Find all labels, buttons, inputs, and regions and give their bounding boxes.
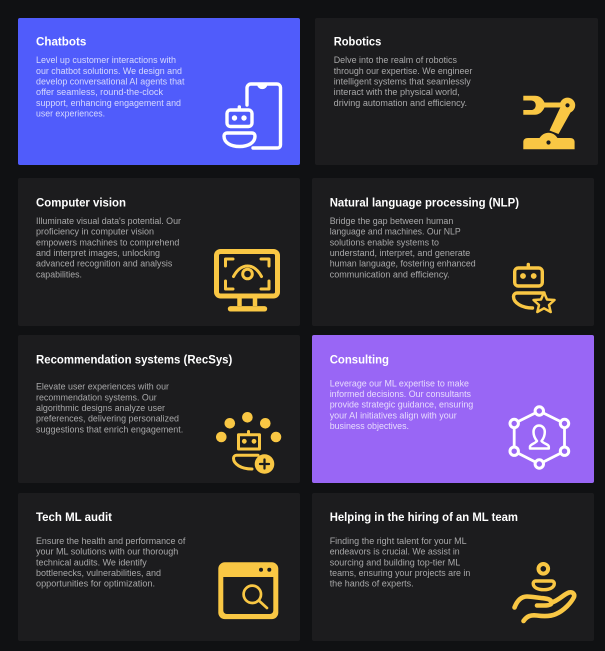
- panel: consulting: [312, 335, 594, 483]
- text block: recommendation description: recommendation systems. Our: [36, 392, 157, 402]
- panel: natural language processing: [312, 178, 594, 326]
- text block: hiring description: Finding the right talent for your ML: [330, 536, 467, 546]
- text block: computer vision description: capabilities.: [36, 269, 82, 279]
- icon: window with magnifier: [218, 562, 278, 619]
- panel: tech ML audit: [18, 493, 300, 641]
- text block: chatbots description: develop conversational AI agents that: [36, 77, 185, 87]
- text block: recommendation description: [36, 382, 183, 435]
- text block: audit description: technical audits. We identify: [36, 557, 147, 567]
- text block: NLP description: communication and efficiency.: [330, 269, 450, 279]
- text block: hiring description: teams, ensuring your projects are in: [330, 568, 470, 578]
- panel: recommendation systems: [18, 335, 300, 483]
- icon: robot with dots and plus: [216, 412, 281, 474]
- panel: robotics: [315, 18, 598, 165]
- text block: recommendation description: algorithmic designs analyze user: [36, 403, 165, 413]
- text block: consulting description: [330, 379, 473, 431]
- heading: computer vision: Computer vision: [36, 195, 126, 209]
- text block: consulting description: provide strategic guidance, ensuring: [330, 400, 473, 410]
- heading: hiring an ML team: Helping in the hiring of an ML team: [330, 510, 518, 524]
- text block: audit description: opportunities for optimization.: [36, 579, 155, 589]
- text block: robotics description: interact with the physical world,: [334, 87, 460, 97]
- text block: chatbots description: user experiences.: [36, 109, 105, 119]
- text block: NLP description: Bridge the gap between human: [330, 216, 453, 226]
- text block: chatbots description: [36, 55, 185, 119]
- text block: recommendation description: Elevate user experiences with our: [36, 382, 169, 392]
- panel: computer vision: [18, 178, 300, 326]
- text block: NLP description: human language, fostering enhanced: [330, 259, 476, 269]
- text block: consulting description: your AI initiatives align with your: [330, 410, 457, 420]
- text block: audit description: [36, 536, 186, 589]
- text block: robotics description: Delve into the realm of robotics: [334, 55, 457, 65]
- heading: robotics: Robotics: [334, 34, 382, 48]
- text block: computer vision description: and interpret images, unlocking: [36, 248, 160, 258]
- heading: consulting: Consulting: [330, 352, 389, 366]
- text block: chatbots description: support, enhancing engagement and: [36, 98, 181, 108]
- text block: consulting description: business objectives.: [330, 421, 409, 431]
- panel: hiring an ML team: [312, 493, 594, 641]
- text block: hiring description: endeavors is crucial. We assist in: [330, 547, 460, 557]
- text block: hiring description: sourcing and building top-tier ML: [330, 557, 460, 567]
- icon: hand holding person: [514, 564, 574, 621]
- text block: audit description: your ML solutions with our thorough: [36, 547, 178, 557]
- text block: NLP description: language and machines. Our NLP: [330, 227, 461, 237]
- text block: robotics description: driving automation and efficiency.: [334, 98, 467, 108]
- heading: natural language processing: Natural language processing (NLP): [330, 195, 519, 209]
- text block: robotics description: through our expertise. We engineer: [334, 66, 472, 76]
- text block: NLP description: solutions enable systems to: [330, 237, 439, 247]
- text block: chatbots description: Level up customer interactions with: [36, 55, 176, 65]
- text block: robotics description: intelligent systems that seamlessly: [334, 77, 471, 87]
- text block: hiring description: the hands of experts.: [330, 579, 414, 589]
- text block: computer vision description: [36, 216, 181, 279]
- text block: computer vision description: empowers machines to comprehend: [36, 237, 179, 247]
- text block: consulting description: Leverage our ML expertise to make: [330, 379, 469, 389]
- heading: recommendation systems: Recommendation systems (RecSys): [36, 352, 232, 366]
- icon: robot arm: [523, 96, 575, 149]
- heading: tech ML audit: Tech ML audit: [36, 510, 112, 524]
- text block: NLP description: understand, interpret, and generate: [330, 248, 470, 258]
- text block: recommendation description: suggestions that enrich engagement.: [36, 425, 183, 435]
- text block: recommendation description: preferences, delivering personalized: [36, 414, 179, 424]
- icon: robot and phone: [224, 84, 280, 148]
- icon: robot with star: [514, 264, 554, 312]
- text block: audit description: Ensure the health and performance of: [36, 536, 186, 546]
- text block: computer vision description: proficiency in computer vision: [36, 227, 154, 237]
- text block: NLP description: [330, 216, 476, 279]
- text block: computer vision description: advanced recognition and analysis: [36, 259, 173, 269]
- text block: robotics description: [334, 55, 472, 108]
- heading: chatbots: Chatbots: [36, 34, 87, 48]
- text block: hiring description: [330, 536, 470, 589]
- icon: monitor with eye: [216, 252, 278, 309]
- text block: audit description: bottlenecks, vulnerabilities, and: [36, 568, 161, 578]
- panel: chatbots: [18, 18, 300, 165]
- text block: chatbots description: offer seamless, round-the-clock: [36, 87, 164, 97]
- text block: consulting description: informed decisions. Our consultants: [330, 389, 471, 399]
- text block: computer vision description: Illuminate visual data's potential. Our: [36, 216, 181, 226]
- text block: chatbots description: our chatbot solutions. We design and: [36, 66, 182, 76]
- icon: network person: [510, 407, 569, 468]
